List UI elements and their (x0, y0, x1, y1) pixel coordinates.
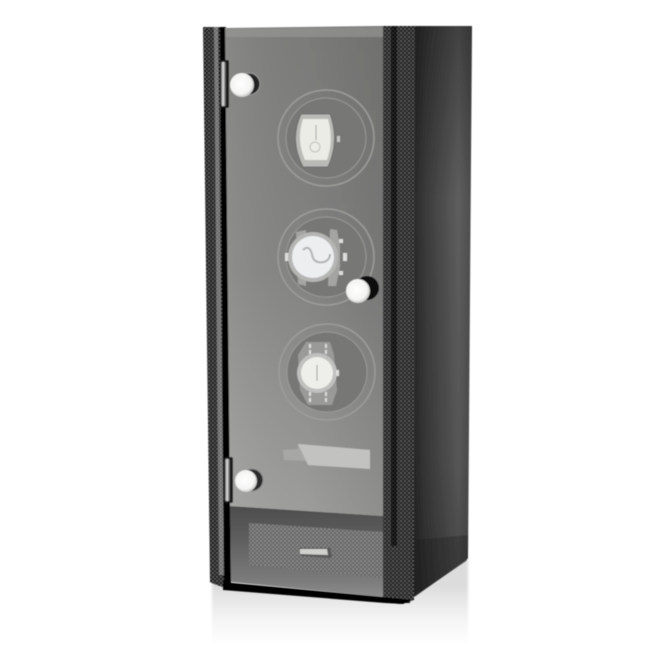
bottom black lip (223, 582, 412, 604)
middle knob (346, 276, 379, 303)
winder 3 (279, 324, 375, 420)
lower glass band (230, 506, 383, 597)
watch 1: tonneau (295, 114, 340, 167)
winder 1 (278, 90, 374, 186)
watch 3: steel bracelet (297, 342, 339, 405)
drawer handle (300, 548, 332, 558)
glass door (225, 26, 383, 516)
bottom knob (235, 469, 263, 492)
drawer (249, 523, 383, 578)
floor reflection (212, 558, 468, 650)
watch 2: chronograph (285, 229, 347, 286)
side panel (405, 26, 472, 603)
right carbon frame (383, 26, 415, 604)
top hinge (220, 60, 229, 108)
left door edge (214, 27, 231, 588)
left carbon frame (203, 27, 231, 590)
logo plate (283, 444, 370, 469)
cabinet body (203, 26, 472, 604)
winder 2 (278, 209, 374, 305)
top knob (230, 73, 260, 97)
bottom hinge (224, 457, 233, 503)
